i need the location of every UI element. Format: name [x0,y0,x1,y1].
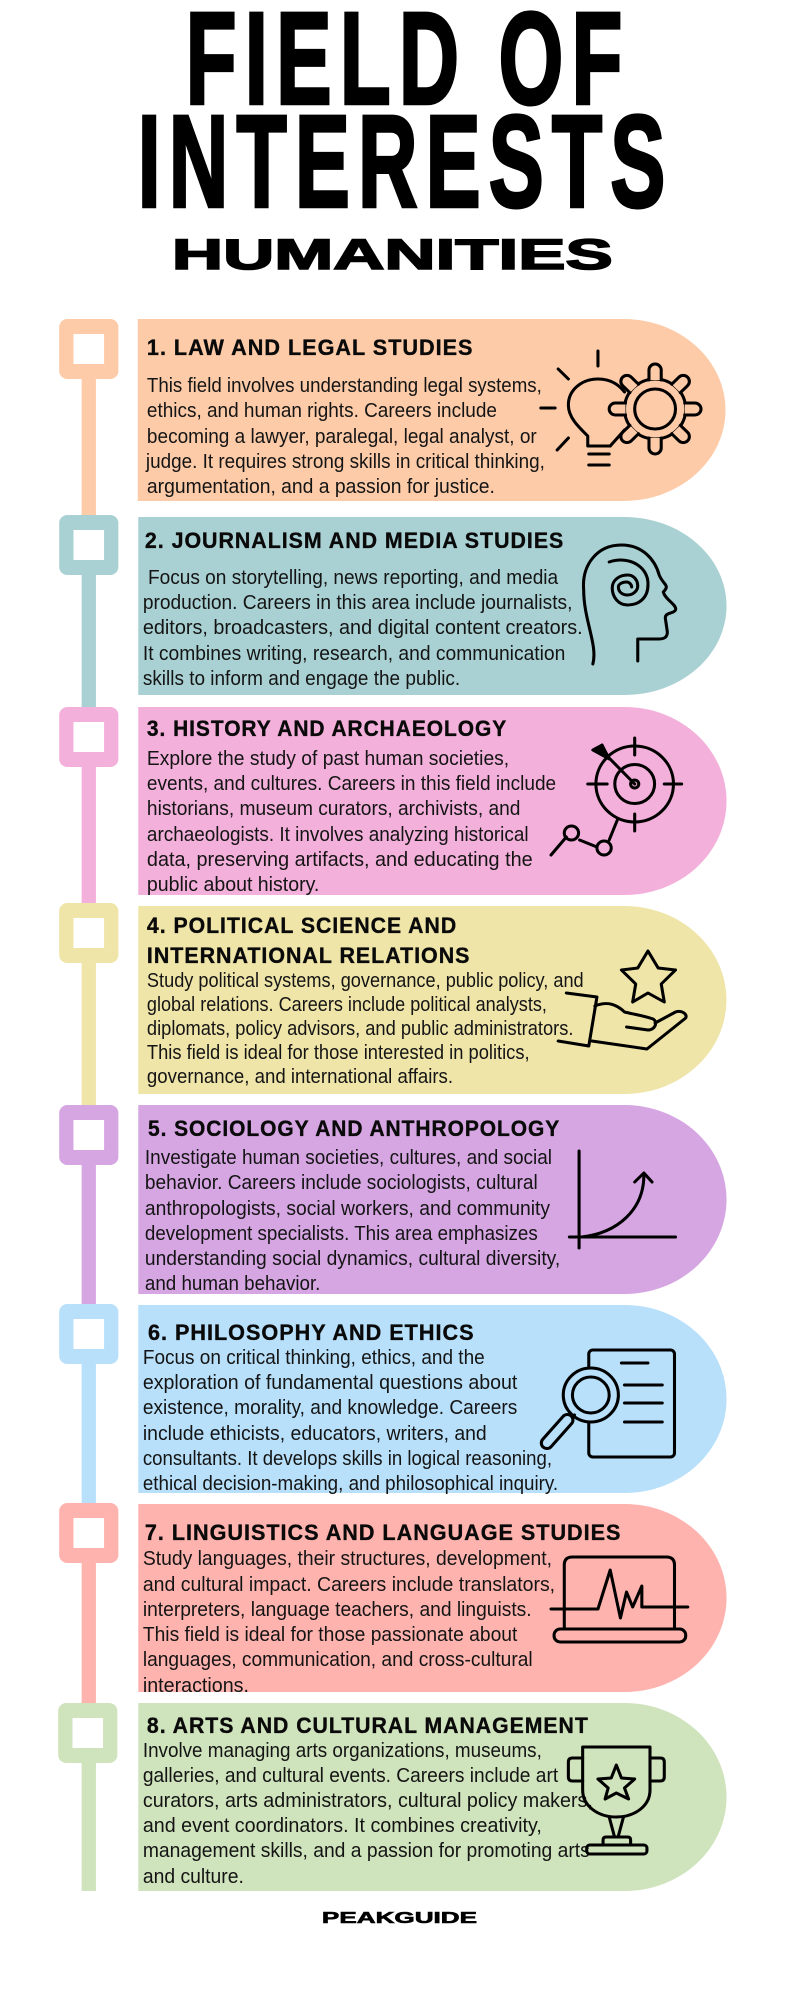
timeline connector 5 [59,1105,118,1306]
icon: growth curve chart [569,1151,676,1248]
panel 8 body text: management skills, and a passion for promoting arts [143,1840,590,1862]
panel 6 body text: consultants. It develops skills in logical reasoning, [143,1448,552,1470]
timeline connector 4 [59,903,118,1107]
panel 6 body text: ethical decision-making, and philosophical inquiry. [143,1473,558,1495]
panel 2 body text: Focus on storytelling, news reporting, and media [148,567,559,589]
panel 7 body text: Study languages, their structures, development, [143,1548,552,1570]
panel 6 body text: Focus on critical thinking, ethics, and the [143,1347,485,1369]
panel 2 body text [143,567,583,690]
panel 8 heading: 8. ARTS AND CULTURAL MANAGEMENT [147,1713,589,1738]
panel 5 body text: anthropologists, social workers, and community [145,1198,551,1220]
panel 4 heading [147,913,470,968]
panel 2 body text: editors, broadcasters, and digital content creators. [143,617,583,639]
panel 2 body text: production. Careers in this area include journalists, [143,592,572,614]
panel 1 body text: This field involves understanding legal systems, [147,375,542,397]
panel 1 background [138,319,726,501]
icon: hand holding star [558,951,686,1049]
panel 7 body text: interactions. [143,1675,249,1697]
icon: target with arrow and chart [551,738,682,855]
panel 5 body text: behavior. Careers include sociologists, cultural [145,1172,538,1194]
panel 1 body text [145,375,545,498]
panel 4 body text: Study political systems, governance, public policy, and [147,970,584,992]
panel 5: sociology and anthropology [138,1105,727,1295]
panel 4 body text: diplomats, policy advisors, and public administrators. [147,1018,573,1040]
timeline connector 7 [59,1503,118,1705]
panel 5 heading: 5. SOCIOLOGY AND ANTHROPOLOGY [148,1116,560,1141]
panel 3 body text: data, preserving artifacts, and educating the [147,849,533,871]
panel 3 body text: archaeologists. It involves analyzing historical [147,824,529,846]
panel 4 body text: governance, and international affairs. [147,1066,453,1088]
panel 6 body text: include ethicists, educators, writers, and [143,1423,487,1445]
panel 3 body text: historians, museum curators, archivists, and [147,798,520,820]
panel 8 body text: and event coordinators. It combines creativity, [143,1815,542,1837]
footer brand: PEAKGUIDE [322,1909,477,1927]
icon: magnifier over document [547,1350,674,1457]
panel 6 body text: existence, morality, and knowledge. Careers [143,1397,517,1419]
panel 3 body text: public about history. [147,874,319,896]
panel 7 background [138,1504,727,1692]
panel 1 body text: ethics, and human rights. Careers include [147,400,497,422]
panel 7 body text: and cultural impact. Careers include translators, [143,1574,555,1596]
panel 7: linguistics and language studies [138,1504,727,1697]
panel 2 heading: 2. JOURNALISM AND MEDIA STUDIES [145,528,564,553]
subtitle: HUMANITIES [172,231,613,279]
panel 5 body text: and human behavior. [145,1273,320,1295]
panel 2: journalism and media studies [138,517,727,695]
panel 4 body text: This field is ideal for those interested in politics, [147,1042,530,1064]
timeline connector 1 [59,319,118,517]
panel 7 body text: languages, communication, and cross-cultural [143,1649,533,1671]
panel 5 body text: understanding social dynamics, cultural diversity, [145,1248,560,1270]
panel 1 body text: argumentation, and a passion for justice. [147,476,495,498]
panel 5 body text [145,1147,560,1295]
title [138,0,673,235]
panel 3 body text: Explore the study of past human societies, [147,748,509,770]
panel 8 body text: curators, arts administrators, cultural policy makers, [143,1790,593,1812]
panel 3 background [138,707,727,895]
panel 4 body text: global relations. Careers include political analysts, [147,994,547,1016]
icon: head with spiral [583,545,676,664]
timeline connector 8 [58,1703,117,1891]
panel 4 heading: 4. POLITICAL SCIENCE AND [147,913,457,938]
panel 6: philosophy and ethics [138,1305,727,1495]
panel 4 background [138,906,726,1094]
timeline connector 6 [59,1304,118,1505]
panel 7 heading: 7. LINGUISTICS AND LANGUAGE STUDIES [145,1520,621,1545]
panel 3 body text [147,748,556,896]
panel 2 background [138,517,727,695]
panel 2 body text: skills to inform and engage the public. [143,668,460,690]
panel 1 heading: 1. LAW AND LEGAL STUDIES [147,335,473,360]
panel 8 body text [143,1740,593,1888]
panel 4: political science and international relations [138,906,726,1094]
timeline connector 2 [59,515,118,709]
panel 2 body text: It combines writing, research, and communication [143,643,565,665]
panel 3 body text: events, and cultures. Careers in this field include [147,773,556,795]
panel 5 background [138,1105,727,1294]
panel 8: arts and cultural management [138,1703,727,1891]
icon: laptop with pulse line [551,1557,688,1642]
panel 7 body text: interpreters, language teachers, and linguists. [143,1599,532,1621]
panel 1 body text: judge. It requires strong skills in critical thinking, [145,451,545,473]
panel 3: history and archaeology [138,707,727,896]
panel 8 body text: and culture. [143,1866,244,1888]
panel 6 body text [143,1347,558,1495]
panel 6 body text: exploration of fundamental questions about [143,1372,518,1394]
panel 1: law and legal studies [138,319,726,501]
panel 8 body text: Involve managing arts organizations, museums, [143,1740,542,1762]
panel 8 background [138,1703,727,1891]
panel 4 body text [147,970,584,1088]
panel 8 body text: galleries, and cultural events. Careers include art [143,1765,559,1787]
panel 6 heading: 6. PHILOSOPHY AND ETHICS [148,1320,474,1345]
icon: trophy with star [568,1747,664,1854]
timeline connector 3 [59,707,118,905]
panel 6 background [138,1305,727,1493]
panel 7 body text [143,1548,555,1697]
icon: lightbulb and gear [541,351,701,465]
panel 4 heading: INTERNATIONAL RELATIONS [147,943,470,968]
panel 5 body text: development specialists. This area emphasizes [145,1223,538,1245]
panel 7 body text: This field is ideal for those passionate about [143,1624,518,1646]
panel 1 body text: becoming a lawyer, paralegal, legal analyst, or [147,426,537,448]
panel 3 heading: 3. HISTORY AND ARCHAEOLOGY [147,716,507,741]
panel 5 body text: Investigate human societies, cultures, and social [145,1147,552,1169]
